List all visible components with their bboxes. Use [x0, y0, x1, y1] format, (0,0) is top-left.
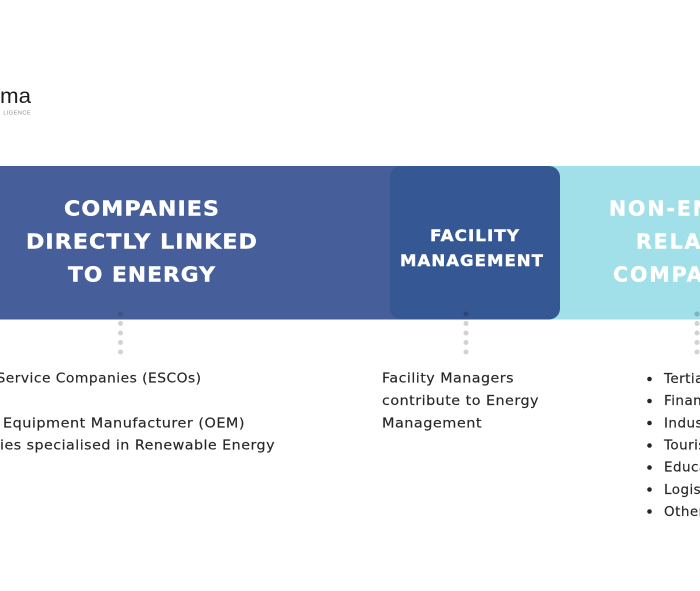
- heading: companies directly linked to energy: TO ENERGY: [68, 262, 216, 286]
- logo: ma: [0, 85, 31, 108]
- text block: energy company types: Equipment Manufacturer (OEM): [3, 416, 245, 432]
- text block: energy company types: ies specialised in Renewable Energy: [0, 438, 275, 454]
- panel: non-energy related companies: [520, 166, 700, 320]
- text block: facility managers: Facility Managers: [382, 370, 514, 386]
- heading: companies directly linked to energy: DIRECTLY LINKED: [26, 230, 258, 254]
- dotted connector: right: [694, 312, 700, 354]
- heading: non-energy related companies: [609, 196, 700, 286]
- heading: companies directly linked to energy: [26, 196, 258, 286]
- logo: [0, 85, 31, 116]
- text block: facility managers: Management: [382, 416, 482, 432]
- heading: facility management: [400, 226, 544, 270]
- panel: companies directly linked to energy: [0, 166, 400, 320]
- list: non-energy sectors: [647, 371, 700, 520]
- text block: energy company types: [0, 370, 275, 454]
- dotted connector: middle: [464, 312, 468, 354]
- logo: LIGENCE: [3, 110, 31, 116]
- panel: facility management: [390, 166, 560, 320]
- dotted connector: left: [118, 312, 123, 354]
- heading: companies directly linked to energy: COMPANIES: [64, 196, 220, 220]
- text block: facility managers: contribute to Energy: [382, 393, 539, 409]
- heading: facility management: MANAGEMENT: [400, 251, 544, 270]
- text block: facility managers: [382, 370, 539, 432]
- text block: energy company types: Service Companies (ESCOs): [0, 370, 202, 386]
- heading: facility management: FACILITY: [430, 226, 520, 245]
